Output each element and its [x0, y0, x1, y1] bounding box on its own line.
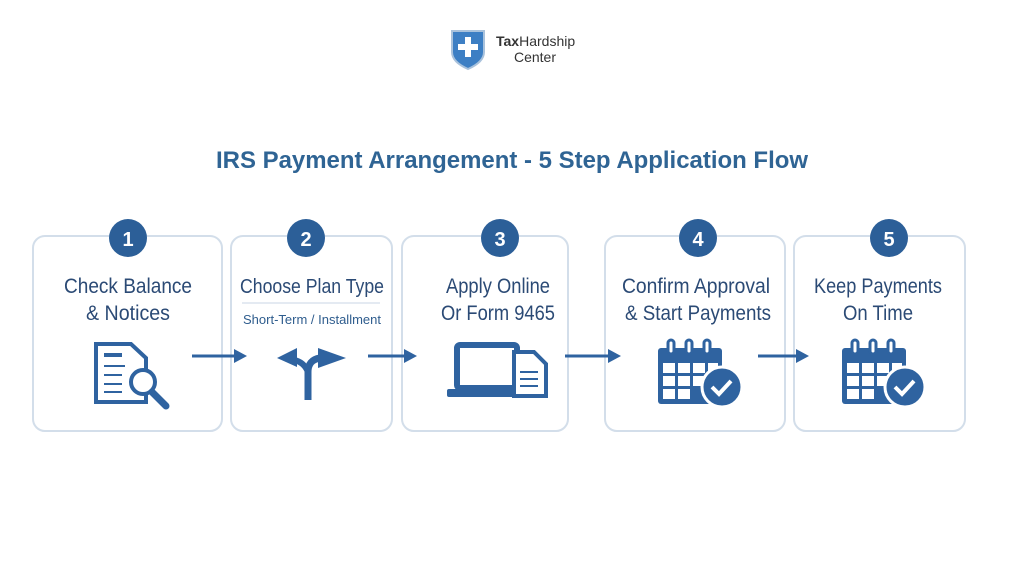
badge 2: 2	[300, 229, 312, 251]
heading 3	[441, 275, 555, 325]
heading 2: Short-Term / Installment	[243, 312, 381, 327]
heading 4: Confirm Approval	[622, 275, 770, 298]
panel: step 5	[794, 219, 965, 431]
heading 1: Check Balance	[64, 275, 192, 298]
logo text	[496, 33, 575, 65]
title: IRS Payment Arrangement - 5 Step Application Flow	[216, 147, 808, 174]
icon: shield	[452, 31, 484, 69]
logo	[452, 31, 575, 69]
panel: step 1	[33, 219, 222, 431]
badge 1	[109, 219, 147, 257]
heading 5: Keep Payments	[814, 275, 942, 298]
icon: calendar check	[658, 340, 742, 407]
badge 4	[679, 219, 717, 257]
icon: laptop and form	[447, 345, 546, 397]
arrow 4	[758, 349, 809, 363]
icon: calendar check	[842, 340, 925, 407]
arrow 3	[565, 349, 621, 363]
logo text: TaxHardship	[496, 33, 575, 49]
heading 3: Or Form 9465	[441, 302, 555, 325]
badge 3: 3	[494, 229, 506, 251]
arrow 1	[192, 349, 247, 363]
icon: fork arrows	[277, 348, 346, 400]
badge 5: 5	[883, 229, 895, 251]
heading 4: & Start Payments	[625, 302, 771, 325]
arrow 2	[368, 349, 417, 363]
badge 3	[481, 219, 519, 257]
icon: document magnifier	[96, 344, 166, 406]
panel: step 4	[605, 219, 785, 431]
heading 1: & Notices	[86, 302, 170, 325]
heading 1	[64, 275, 192, 325]
logo text: Center	[514, 49, 556, 65]
heading 5	[814, 275, 942, 325]
heading 2	[240, 276, 384, 327]
heading 3: Apply Online	[446, 275, 550, 298]
panel: step 3	[402, 219, 568, 431]
heading 2: Choose Plan Type	[240, 276, 384, 298]
heading 5: On Time	[843, 302, 913, 325]
panel: step 2	[231, 219, 392, 431]
heading 4	[622, 275, 771, 325]
badge 1: 1	[122, 229, 134, 251]
badge 4: 4	[692, 229, 704, 251]
badge 5	[870, 219, 908, 257]
badge 2	[287, 219, 325, 257]
